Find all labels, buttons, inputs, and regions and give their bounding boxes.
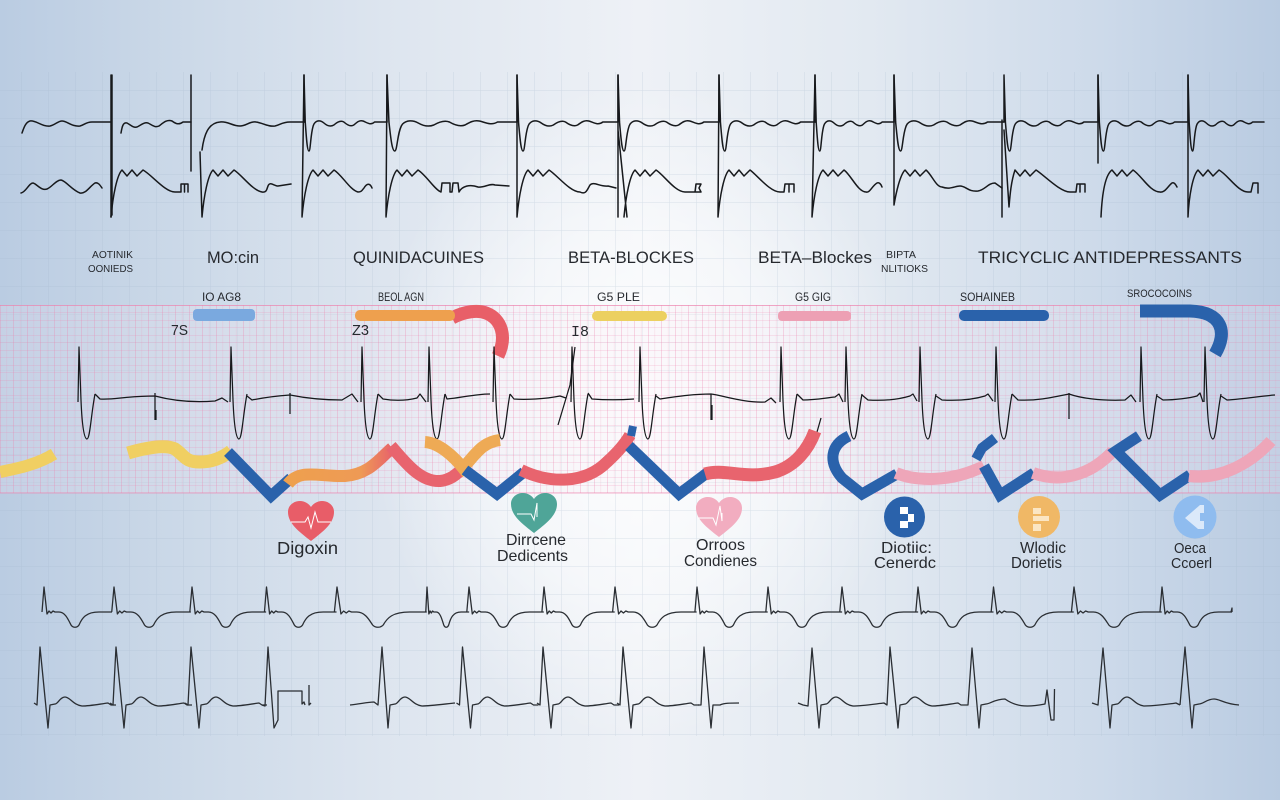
- bar: dark blue arc: [1140, 311, 1221, 354]
- top ECG strip, upper lead: [22, 75, 1264, 217]
- icon: light blue circle: [1174, 496, 1216, 538]
- bar label: G5 PLE: G5 PLE: [597, 292, 640, 304]
- bar label: SOHAINEB: SOHAINEB: [960, 292, 1015, 304]
- ribbon: blue tip: [631, 426, 633, 436]
- bar label: IO AG8: IO AG8: [202, 292, 241, 304]
- label: Orroos Condienes: Condienes: [684, 553, 757, 570]
- heading: MO:cin: MO:cin: [207, 248, 259, 267]
- lower ECG strip, first lead: [42, 587, 1232, 627]
- heading: small left note: AOTINIK: [92, 250, 133, 261]
- label: Diotiic Cenerdc: [874, 540, 936, 572]
- bar: red arc: [452, 311, 502, 356]
- drug class headings: [88, 248, 1242, 275]
- label: Wlodic Dorietis: [1011, 540, 1066, 572]
- label: Oeca Ccoerl: Oeca: [1174, 540, 1207, 557]
- middle ECG trace: [78, 347, 1275, 439]
- label: Oeca Ccoerl: Ccoerl: [1171, 555, 1212, 572]
- heading: Beta-Blockes: BETA–Blockes: [758, 248, 872, 267]
- ribbon: blue V four: [984, 466, 1034, 495]
- heading: small right note: BIPTA: [886, 250, 916, 261]
- label: Dirrcene Dedicents: [497, 532, 568, 565]
- bar label: BEOL AGN: BEOL AGN: [378, 292, 424, 304]
- ribbon: orange cross: [425, 440, 500, 468]
- icon: teal heart: [511, 493, 557, 533]
- ribbon: blue hook: [833, 436, 897, 494]
- label: Wlodic Dorietis: Wlodic: [1020, 540, 1066, 557]
- label: Oeca Ccoerl: [1171, 540, 1212, 572]
- heading: small left note: OONIEDS: [88, 264, 133, 275]
- icon: pink heart: [696, 497, 742, 537]
- ribbon: orange to red: [288, 448, 392, 484]
- label: Digoxin: Digoxin: [277, 538, 338, 558]
- bar label: SROCOCOINS: SROCOCOINS: [1127, 288, 1192, 300]
- ribbon: red two: [521, 435, 630, 480]
- heading: Quinidacuines: QUINIDACUINES: [353, 248, 484, 267]
- drug icons and labels: [277, 493, 1216, 572]
- ribbon: blue short: [976, 438, 995, 459]
- heading: small right note: NLITIOKS: [881, 264, 928, 275]
- ribbon: blue V two: [465, 470, 524, 494]
- ribbon: pink three: [1189, 441, 1271, 477]
- label: Dirrcene Dedicents: Dedicents: [497, 548, 568, 565]
- label: Wlodic Dorietis: Dorietis: [1011, 555, 1062, 572]
- heading: small right note: [881, 250, 928, 275]
- icon: amber circle: [1018, 496, 1060, 538]
- label: Diotiic Cenerdc: Diotiic:: [881, 540, 932, 557]
- pink ECG paper band: [0, 305, 1280, 493]
- bar: orange: [355, 310, 455, 321]
- ribbon: red three: [705, 431, 815, 475]
- label: Diotiic Cenerdc: Cenerdc: [874, 555, 936, 572]
- top ECG strip, lower lead: [21, 75, 1258, 217]
- bar: light blue: [193, 309, 255, 321]
- ribbon: pink two: [1033, 451, 1113, 477]
- ribbon: blue V three: [629, 446, 707, 494]
- ribbon: blue V one: [228, 452, 291, 496]
- bar: yellow: [592, 311, 667, 321]
- bar label: G5 GIG: G5 GIG: [795, 292, 831, 304]
- ribbon: blue V five: [1116, 436, 1190, 495]
- label: Dirrcene Dedicents: Dirrcene: [506, 532, 566, 549]
- heading: Tricyclic antidepressants: TRICYCLIC ANTIDEPRESSANTS: [978, 248, 1242, 267]
- ribbon: red one: [391, 446, 464, 481]
- ribbon: pink one: [896, 466, 984, 479]
- heading: Beta-Blockes caps: BETA-BLOCKES: [568, 248, 694, 267]
- icon: red heart: [288, 501, 334, 541]
- value: Z3: Z3: [352, 322, 369, 339]
- bar: pink: [778, 311, 851, 321]
- colored drug ribbon: [0, 426, 1271, 496]
- heading: small left note: [88, 250, 133, 275]
- label: Orroos Condienes: [684, 537, 757, 570]
- icon: navy circle: [884, 496, 925, 538]
- colored marker bars and labels: [171, 288, 1221, 356]
- value: I8: I8: [571, 324, 589, 341]
- bar: dark blue: [959, 310, 1049, 321]
- ribbon: yellow second: [128, 447, 231, 462]
- value: 7S: 7S: [171, 322, 188, 339]
- lower ECG strip, second lead: [34, 647, 1239, 728]
- ribbon: yellow left: [0, 454, 54, 472]
- label: Orroos Condienes: Orroos: [696, 537, 745, 554]
